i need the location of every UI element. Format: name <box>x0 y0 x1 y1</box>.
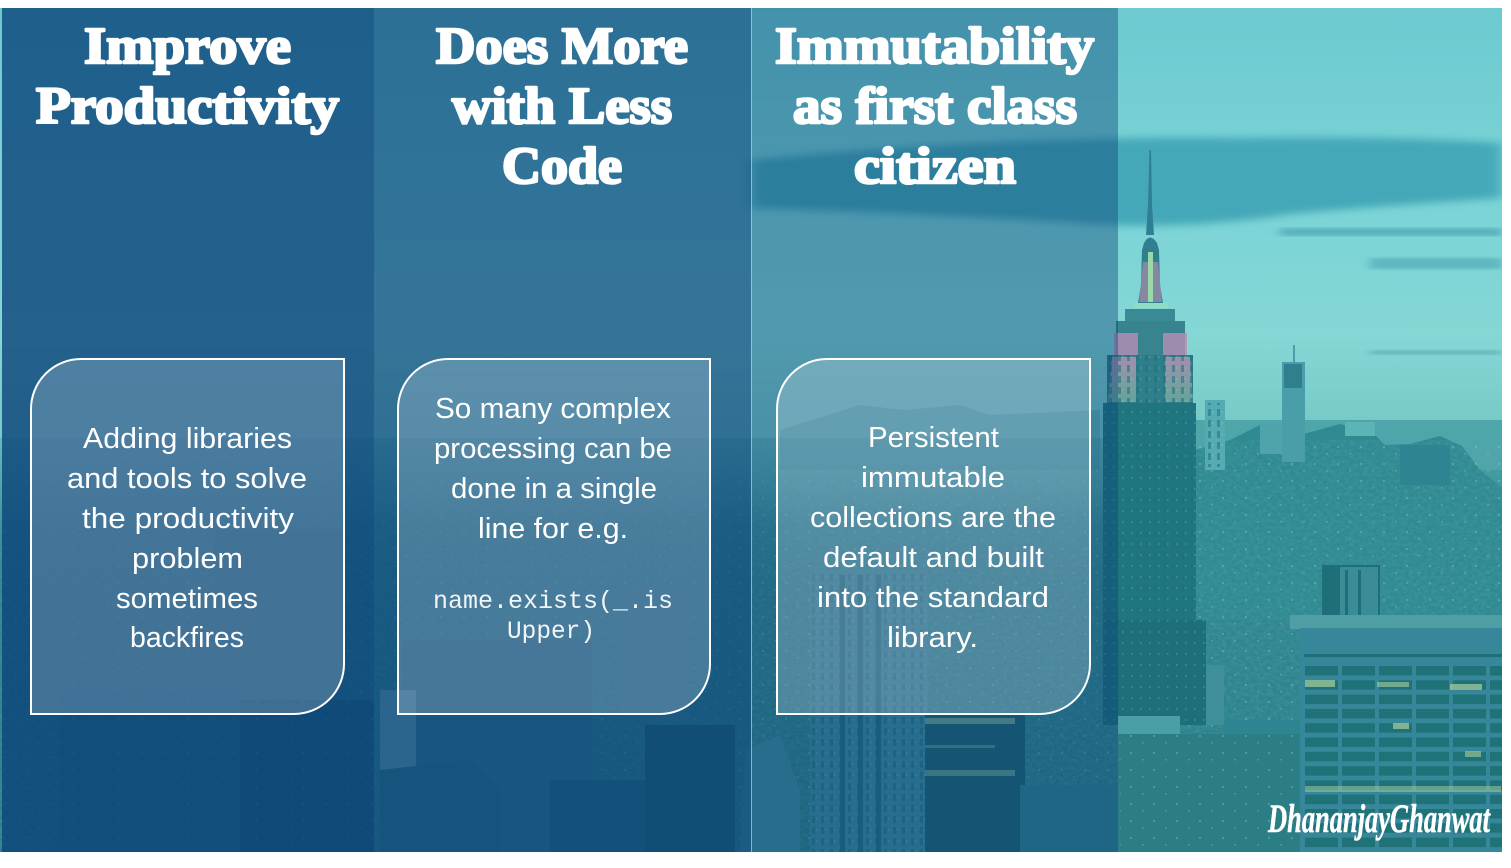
card text: less code: So many complex <box>435 393 671 425</box>
clouds <box>750 138 1502 355</box>
code sample: Upper) <box>507 617 595 646</box>
card text: immutability: library. <box>887 622 978 654</box>
card text: immutability: into the standard <box>817 582 1049 614</box>
card text: immutability: Persistent <box>868 422 999 454</box>
panel: column 1 tint <box>2 8 374 852</box>
column 3 divider <box>751 8 752 852</box>
mid-ground buildings <box>355 572 1300 852</box>
card text: productivity: problem <box>132 543 243 575</box>
foreground building right <box>1290 565 1502 852</box>
card text: less code: line for e.g. <box>478 513 628 545</box>
heading: Improve Productivity: Improve <box>84 18 291 75</box>
card text: productivity <box>67 423 307 654</box>
card text: productivity: the productivity <box>82 503 295 535</box>
card: productivity problem <box>31 359 344 714</box>
heading: Does More with Less Code: Does More <box>436 18 688 75</box>
card text: productivity: and tools to solve <box>67 463 307 495</box>
card: less code <box>398 359 710 714</box>
heading: Immutability as first class citizen: citizen <box>854 138 1016 195</box>
card text: less code <box>434 393 672 545</box>
heading: Immutability as first class citizen: as first class <box>793 78 1077 135</box>
heading: Does More with Less Code: Code <box>502 138 622 195</box>
heading: Immutability as first class citizen <box>775 18 1094 195</box>
card text: immutability: collections are the <box>810 502 1056 534</box>
card text: less code: processing can be <box>434 433 672 465</box>
heading: Does More with Less Code <box>436 18 688 195</box>
card text: productivity: Adding libraries <box>83 423 292 455</box>
code sample: name.exists(_.is <box>433 587 673 616</box>
card text: productivity: sometimes <box>116 583 258 615</box>
card text: immutability <box>810 422 1056 654</box>
heading: Improve Productivity: Productivity <box>36 78 339 135</box>
heading: Improve Productivity <box>36 18 339 135</box>
panel: column 2 tint <box>374 8 751 852</box>
Empire State Building <box>1103 150 1224 725</box>
card text: immutability: default and built <box>823 542 1044 574</box>
card: immutability <box>777 359 1090 714</box>
card text: immutability: immutable <box>861 462 1005 494</box>
distant towers <box>1205 345 1450 485</box>
code sample <box>433 587 673 646</box>
heading: Does More with Less Code: with Less <box>452 78 672 135</box>
card text: less code: done in a single <box>451 473 657 505</box>
panel: column 3 tint <box>751 8 1118 852</box>
heading: Immutability as first class citizen: Immutability <box>775 18 1094 75</box>
card text: productivity: backfires <box>130 622 244 654</box>
city mass <box>0 400 1502 852</box>
